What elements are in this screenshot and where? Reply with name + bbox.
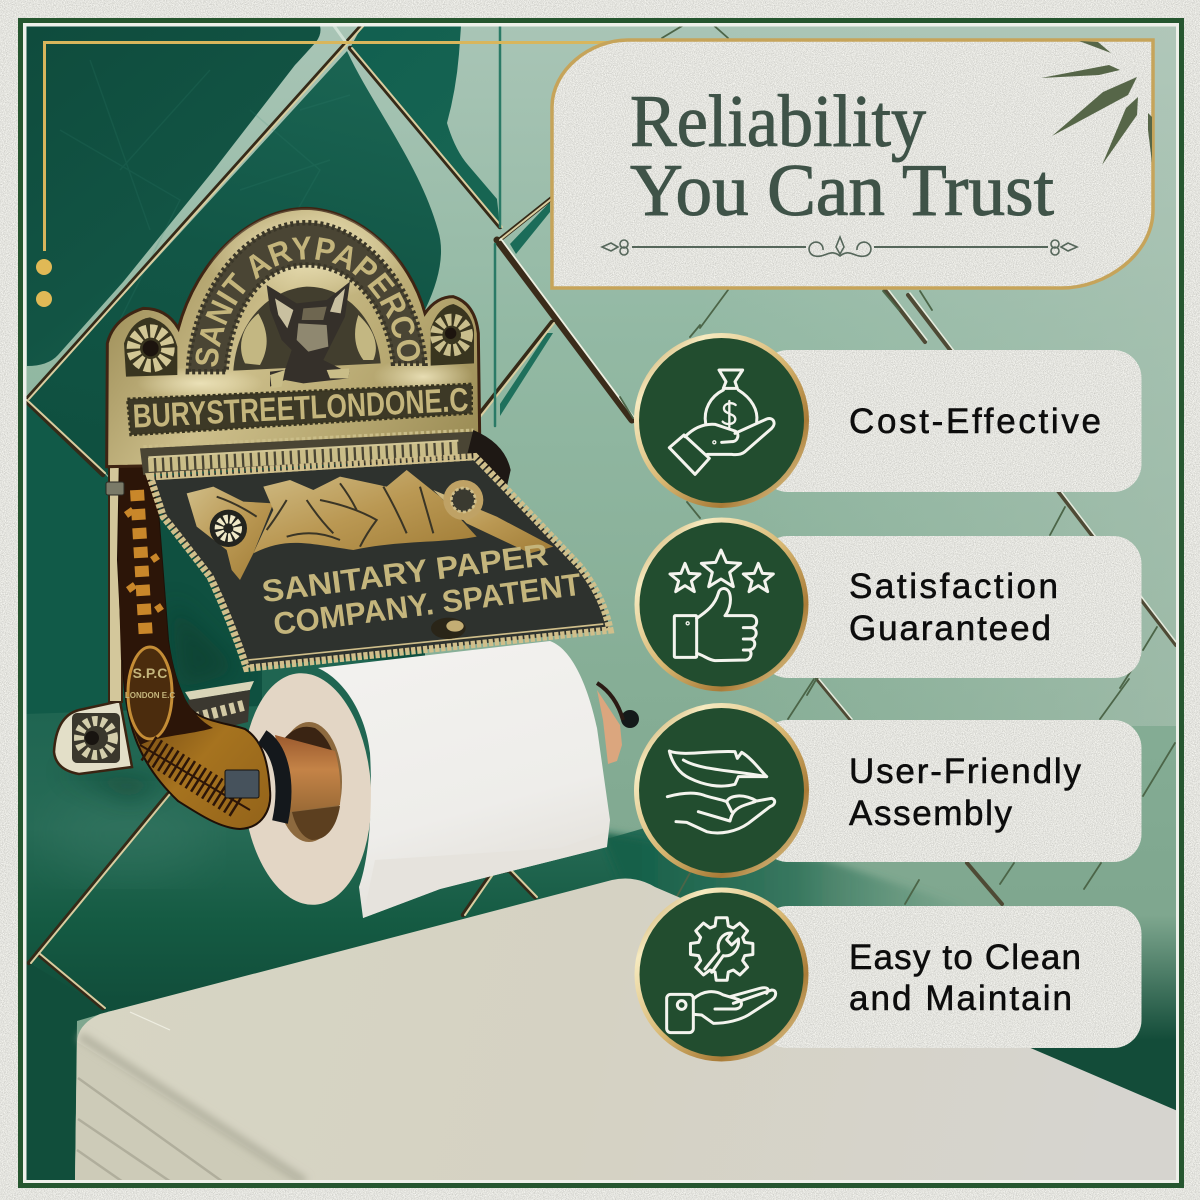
tile seams: [27, 23, 1176, 1008]
label: Easy to Clean: [849, 938, 1081, 977]
side rosettes: [124, 304, 474, 377]
comb band: [140, 430, 473, 475]
label: User-Friendly: [849, 752, 1082, 791]
street band: BURYSTREETLONDONE.C: [132, 382, 469, 436]
label: and Maintain: [849, 979, 1072, 1018]
cover lettering: SANITARY PAPER: [260, 537, 550, 609]
label: Cost-Effective: [849, 402, 1101, 441]
side arm: LONDON E.C: [125, 691, 175, 700]
lower mounting plate: [54, 681, 254, 774]
back plate: [107, 208, 480, 467]
badge: gear and wrench over hand: [637, 890, 806, 1059]
fox head emblem: [233, 282, 381, 388]
heading: You Can Trust: [630, 150, 1054, 232]
item: easy to clean: [637, 890, 1142, 1059]
label: [849, 938, 1081, 1018]
brass relief figures: [187, 470, 553, 580]
heading: Reliability: [630, 81, 926, 163]
label: Satisfaction: [849, 567, 1058, 606]
ornamental divider: [602, 237, 1077, 256]
toilet paper roll: [235, 641, 639, 918]
title panel: [552, 40, 1153, 288]
item: user-friendly assembly: [636, 706, 1142, 876]
bamboo leaves: [1041, 41, 1152, 165]
cast shadow on wall: [88, 626, 220, 802]
label: [849, 567, 1058, 648]
gold corner line: [44, 42, 628, 251]
arch band with company name: SANIT ARYPAPERCO: [195, 236, 420, 367]
gold dots: [36, 259, 52, 307]
badge: thumbs up with stars: [637, 520, 806, 689]
brass holder head: [105, 206, 614, 672]
label: Assembly: [849, 794, 1012, 833]
cover side: [467, 430, 511, 495]
item: cost-effective: [636, 336, 1142, 506]
label: Guaranteed: [849, 609, 1051, 648]
item: satisfaction guaranteed: [637, 520, 1142, 689]
cover lettering: [263, 544, 580, 634]
badge: money bag in hand: [636, 336, 806, 506]
toilet tank: [75, 879, 1180, 1185]
cover lettering: COMPANY. SPATENT: [271, 567, 583, 642]
badge: feather over hand: [636, 706, 806, 876]
cover pin: [431, 618, 466, 639]
curved cover plate: [150, 457, 610, 668]
side arm: S.P.C: [133, 665, 167, 681]
side arm: [106, 440, 283, 829]
heading: [630, 81, 1054, 232]
label: [849, 752, 1082, 833]
